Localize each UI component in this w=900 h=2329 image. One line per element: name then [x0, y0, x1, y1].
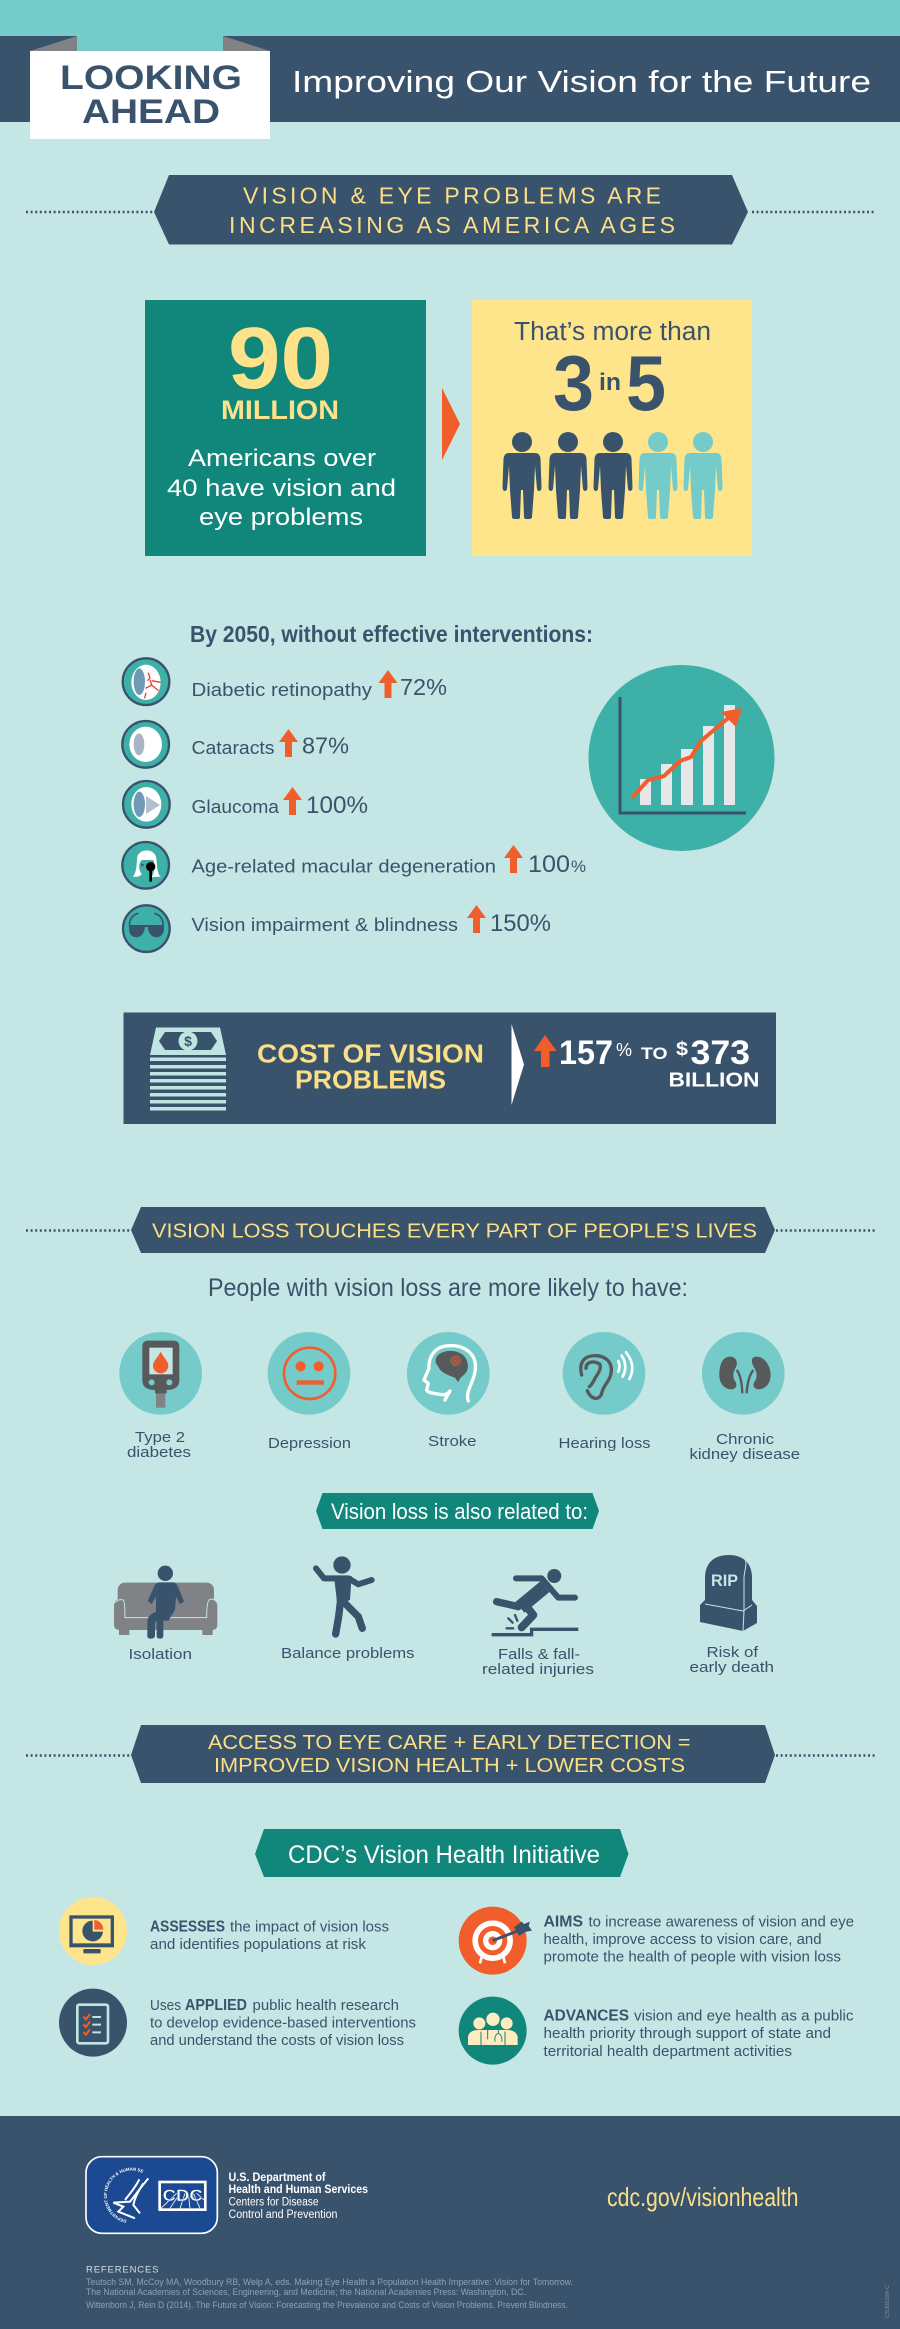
icon: target and arrow — [459, 1907, 532, 1975]
outcome labels: related injuries — [482, 1661, 594, 1678]
cost figures: % — [616, 1040, 632, 1060]
panel: initiative items — [59, 1897, 854, 2065]
panel: 3 in 5 — [472, 300, 752, 556]
condition labels: Stroke — [428, 1433, 476, 1450]
heading banner: vision loss touches: VISION LOSS TOUCHES EVERY PART OF PEOPLE’S LIVES — [152, 1221, 757, 1243]
text: assesses: ASSESSES — [150, 1918, 225, 1936]
heading banner: vision loss touches — [26, 1207, 875, 1253]
label: age-related macular degeneration: Age-related macular degeneration — [192, 856, 496, 876]
arrow — [442, 388, 460, 460]
text: aims: to increase awareness of vision and eye — [588, 1914, 854, 1930]
label: cataracts: 87% — [302, 732, 349, 758]
cost figures: 157 — [559, 1034, 613, 1072]
heading: by 2050: By 2050, without effective interventions: — [190, 621, 593, 647]
references: The National Academies of Sciences, Engineering, and Medicine; the National Academies Press: Washington, DC. — [86, 2287, 526, 2297]
label: diabetic retinopathy: 72% — [400, 674, 447, 700]
logo: HHS and CDC: CDC — [163, 2186, 203, 2205]
heading banner: access to eye care — [26, 1725, 875, 1783]
title: LOOKING — [60, 59, 242, 97]
label: glaucoma — [192, 787, 368, 819]
text: aims: AIMS — [544, 1914, 583, 1930]
cost figures: 373 — [690, 1034, 750, 1072]
icon: kidneys — [702, 1332, 785, 1415]
icon: person falling — [492, 1569, 578, 1635]
outcome labels — [128, 1644, 774, 1678]
text: applied: to develop evidence-based interventions — [150, 2016, 416, 2032]
outcome labels: Falls & fall- — [498, 1646, 580, 1663]
references: REFERENCES — [86, 2264, 158, 2276]
agency name: Health and Human Services — [228, 2184, 368, 2196]
text: applied: public health research — [252, 1998, 399, 2014]
condition labels: kidney disease — [690, 1446, 800, 1463]
text: aims: health, improve access to vision care, and — [544, 1932, 822, 1948]
header band — [0, 0, 900, 139]
condition labels: Chronic — [716, 1431, 775, 1448]
agency name: Centers for Disease — [228, 2196, 318, 2208]
heading banner: access to eye care: IMPROVED VISION HEALTH + LOWER COSTS — [214, 1755, 685, 1777]
subheading banner: CDC's vision health initiative — [255, 1829, 628, 1877]
subheading banner: CDC's vision health initiative: CDC’s Vision Health Initiative — [288, 1841, 600, 1869]
icon: money stack: $ — [184, 1033, 192, 1049]
icons: related outcomes — [114, 1555, 757, 1639]
panel: 3 in 5: 5 — [626, 339, 666, 427]
text: applied: and understand the costs of vision loss — [150, 2033, 404, 2049]
heading banner: vision and eye problems: VISION & EYE PROBLEMS ARE — [243, 182, 661, 208]
text: aims — [544, 1914, 854, 1966]
label: cataracts — [192, 729, 349, 758]
text: applied: APPLIED — [185, 1997, 247, 2014]
cost figures: $ — [676, 1039, 688, 1060]
text: assesses: and identifies populations at risk — [150, 1937, 367, 1953]
condition labels — [127, 1429, 800, 1463]
references: Teutsch SM, McCoy MA, Woodbury RB, Welp A, eds. Making Eye Health a Population Health Imperative: Vision for Tomorrow. — [86, 2277, 573, 2287]
label: age-related macular degeneration: % — [571, 857, 586, 876]
title — [60, 59, 242, 131]
icon: glucose meter — [119, 1332, 202, 1415]
outcome labels: early death — [690, 1659, 774, 1676]
agency name: U.S. Department of — [228, 2172, 326, 2184]
icon: gravestone: RIP — [711, 1571, 738, 1590]
heading banner: access to eye care: ACCESS TO EYE CARE + EARLY DETECTION = — [208, 1732, 690, 1754]
icon: checklist — [59, 1989, 127, 2057]
title: AHEAD — [82, 93, 220, 131]
text: advances: health priority through support of state and — [544, 2026, 831, 2042]
condition labels: Type 2 — [135, 1429, 185, 1446]
condition labels: Depression — [268, 1435, 351, 1452]
text: assesses: the impact of vision loss — [230, 1920, 389, 1936]
website: cdc.gov/visionhealth — [607, 2182, 798, 2212]
icon: macular degeneration face — [122, 842, 169, 889]
condition labels: Hearing loss — [558, 1435, 650, 1452]
panel: cost of vision problems: COST OF VISION — [257, 1038, 484, 1068]
panel: 90 million: 40 have vision and — [167, 475, 396, 502]
icon: diabetic retinopathy eye — [123, 658, 169, 705]
heading banner: vision and eye problems: INCREASING AS AMERICA AGES — [229, 212, 675, 238]
panel: 90 million: eye problems — [199, 504, 363, 531]
cost figures: TO — [641, 1044, 668, 1063]
panel: 90 million: 90 — [228, 310, 333, 407]
icon: head and brain — [407, 1332, 490, 1415]
panel: 3 in 5: 3 — [553, 339, 594, 427]
text: aims: promote the health of people with vision loss — [544, 1950, 841, 1966]
panel: 90 million: Americans over — [188, 445, 376, 472]
icons: related conditions — [119, 1332, 785, 1415]
icon: cataracts eye — [122, 721, 169, 768]
icon: sunglasses — [123, 905, 170, 952]
icon: person off balance — [316, 1556, 372, 1634]
panel: projected increases — [122, 658, 586, 952]
panel: 90 million: MILLION — [221, 395, 339, 425]
panel: cost of vision problems: PROBLEMS — [295, 1064, 446, 1094]
people pictogram — [502, 432, 722, 519]
text: advances: territorial health department activities — [544, 2044, 792, 2060]
outcome labels: Isolation — [128, 1646, 192, 1663]
label: glaucoma: Glaucoma — [192, 796, 280, 817]
panel: cost of vision problems — [124, 1012, 776, 1124]
cost figures — [559, 1034, 760, 1092]
icon: health professionals — [459, 1997, 527, 2065]
icon: neutral face — [268, 1332, 350, 1415]
icon: ear — [563, 1332, 645, 1415]
subheading banner: also related to: Vision loss is also related to: — [331, 1499, 588, 1524]
logo: HHS and CDC — [85, 2156, 218, 2234]
label: vision impairment and blindness: Vision impairment & blindness — [192, 914, 458, 935]
logo: HHS and CDC: DEPARTMENT OF HEALTH & HUMAN SERVICES USA — [104, 2168, 144, 2223]
outcome labels: Balance problems — [281, 1645, 414, 1662]
condition labels: diabetes — [127, 1444, 191, 1461]
icon: person alone on couch — [114, 1566, 217, 1639]
text: applied — [150, 1997, 416, 2049]
panel: 90 million — [145, 300, 426, 556]
subheading banner: also related to — [316, 1493, 599, 1529]
label: vision impairment and blindness — [192, 905, 551, 937]
heading: people with vision loss: People with vision loss are more likely to have: — [208, 1274, 688, 1302]
outcome labels: Risk of — [706, 1644, 759, 1661]
label: age-related macular degeneration — [192, 845, 586, 878]
label: vision impairment and blindness: 150% — [490, 910, 551, 937]
label: cataracts: Cataracts — [192, 737, 274, 758]
text: applied: Uses — [150, 1998, 181, 2014]
agency name: Control and Prevention — [228, 2209, 338, 2221]
footer — [0, 2116, 900, 2329]
subtitle: Improving Our Vision for the Future — [292, 64, 871, 99]
chart: rising trend — [588, 665, 774, 851]
publication code: CS308298-C — [885, 2285, 891, 2318]
icon: money stack — [150, 1028, 226, 1110]
icon: gravestone — [700, 1555, 757, 1631]
text: advances: ADVANCES — [544, 2008, 629, 2024]
label: age-related macular degeneration: 100 — [528, 851, 570, 878]
label: diabetic retinopathy — [192, 670, 447, 700]
references: Wittenborn J, Rein D (2014). The Future of Vision: Forecasting the Prevalence and Costs of Vision Problems. Prevent Blindness. — [86, 2300, 568, 2310]
agency name — [228, 2172, 368, 2221]
label: diabetic retinopathy: Diabetic retinopathy — [192, 679, 373, 700]
panel: 3 in 5: in — [599, 369, 621, 396]
cost figures: BILLION — [668, 1070, 760, 1092]
references — [86, 2264, 573, 2310]
icon: glaucoma eye — [123, 781, 170, 828]
icon: monitor with pie chart — [59, 1897, 127, 1965]
panel: 3 in 5: That’s more than — [514, 318, 711, 346]
heading banner: vision and eye problems — [26, 175, 875, 244]
text: assesses — [150, 1918, 389, 1953]
arrow: cost increase — [534, 1035, 556, 1067]
label: glaucoma: 100% — [306, 792, 368, 819]
text: advances: vision and eye health as a public — [634, 2008, 854, 2024]
text: advances — [544, 2008, 854, 2060]
